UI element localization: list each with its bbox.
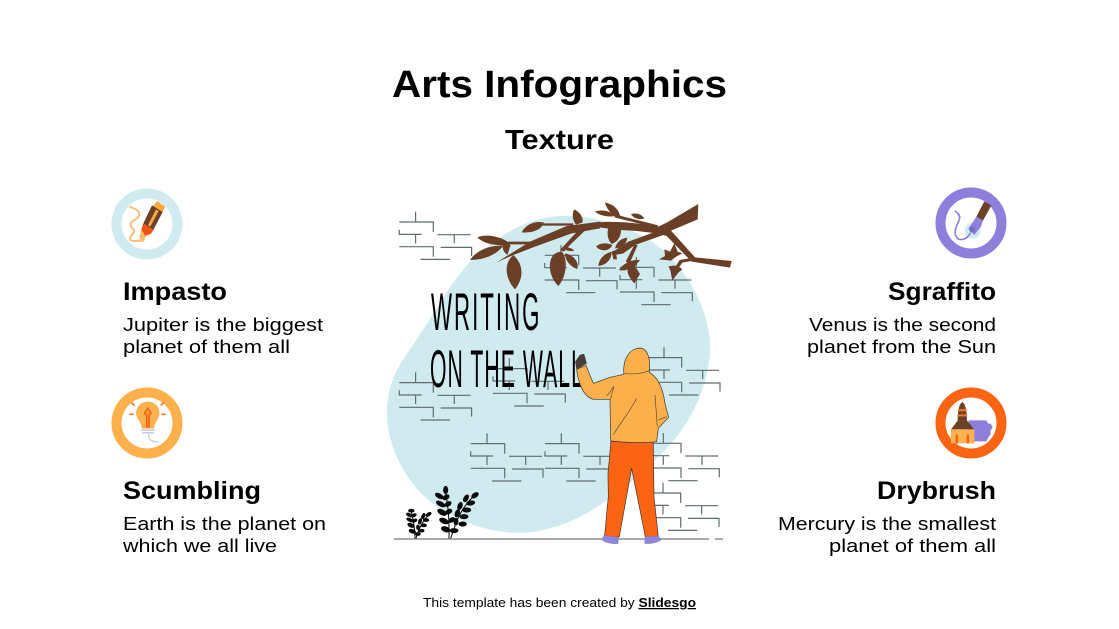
glove xyxy=(575,354,587,369)
heading: Drybrush xyxy=(877,477,996,505)
heading: Sgraffito xyxy=(888,278,996,306)
panel: Sgraffito xyxy=(807,192,1002,357)
icon: marker pen xyxy=(116,194,178,254)
description: Venus is the second xyxy=(809,315,996,335)
description: Jupiter is the biggest xyxy=(123,315,323,335)
graffiti text: ON THE WALL xyxy=(430,338,584,399)
person painting the wall xyxy=(575,348,669,544)
graffiti text xyxy=(430,282,584,399)
ground line xyxy=(394,538,723,540)
subtitle: Texture xyxy=(505,124,614,155)
graffiti text: WRITING xyxy=(431,282,542,342)
description: planet from the Sun xyxy=(807,337,996,357)
heading: Scumbling xyxy=(123,477,261,505)
blue blob xyxy=(387,216,710,533)
description: planet of them all xyxy=(829,536,996,556)
icon: dry brush xyxy=(940,392,1002,454)
heading: Impasto xyxy=(123,278,227,306)
description xyxy=(778,514,996,556)
panel: Impasto xyxy=(116,194,323,357)
description xyxy=(807,315,996,357)
description: Mercury is the smallest xyxy=(778,514,996,534)
central illustration xyxy=(387,203,732,544)
description: which we all live xyxy=(122,536,277,556)
title: Arts Infographics xyxy=(392,64,727,106)
panel: Drybrush xyxy=(778,392,1002,556)
description xyxy=(123,315,323,357)
footer credit: This template has been created by Slidesgo xyxy=(423,596,696,610)
icon: light bulb xyxy=(116,392,178,454)
description xyxy=(122,514,326,556)
description: Earth is the planet on xyxy=(123,514,326,534)
brick wall xyxy=(399,212,720,530)
plants xyxy=(406,486,479,538)
hoodie xyxy=(577,348,669,443)
panel: Scumbling xyxy=(116,392,326,556)
tree branch with leaves xyxy=(470,203,732,289)
description: planet of them all xyxy=(123,337,290,357)
shoes xyxy=(602,535,661,544)
trousers xyxy=(605,441,658,538)
icon: fountain pen xyxy=(940,192,1002,254)
